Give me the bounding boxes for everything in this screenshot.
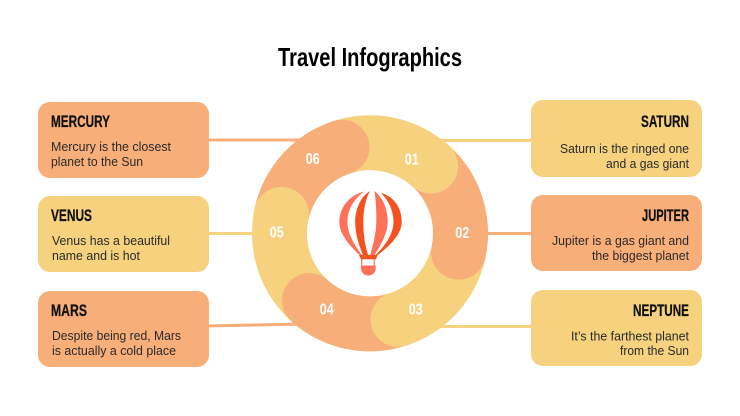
panel: jupiter [531, 195, 702, 271]
panel: saturn: and a gas giant [606, 157, 689, 171]
title: Travel Infographics [278, 42, 462, 72]
panel: venus [38, 196, 209, 272]
panel: mars: MARS [51, 302, 87, 320]
panel: saturn: SATURN [641, 113, 689, 131]
panel: neptune: It’s the farthest planet [571, 330, 690, 344]
panel: neptune: NEPTUNE [633, 302, 689, 320]
panel: mercury: planet to the Sun [51, 155, 143, 169]
panel: mars [38, 291, 209, 367]
panel: venus: Venus has a beautiful [52, 234, 170, 248]
panel: jupiter: JUPITER [642, 207, 689, 225]
ring diagram: 06 [306, 151, 320, 168]
ring diagram: 04 [320, 302, 334, 318]
panel: jupiter: the biggest planet [592, 249, 690, 263]
panel: mars: Despite being red, Mars [52, 329, 181, 343]
ring diagram: 05 [270, 224, 284, 242]
panel: venus: name and is hot [52, 249, 141, 263]
panel: mars: is actually a cold place [52, 344, 176, 358]
panel: neptune: from the Sun [620, 344, 689, 358]
connector lines [205, 140, 535, 326]
panel: mercury: Mercury is the closest [51, 140, 172, 154]
panel: mercury [38, 102, 209, 178]
ring diagram: 02 [455, 225, 469, 242]
panel: neptune [531, 290, 702, 366]
ring diagram [254, 138, 469, 347]
panel: saturn [531, 100, 702, 177]
panel: saturn: Saturn is the ringed one [560, 142, 689, 156]
panel: venus: VENUS [51, 207, 92, 225]
ring diagram: 01 [405, 152, 419, 168]
panel: mercury: MERCURY [51, 113, 110, 131]
ring diagram: 03 [409, 302, 423, 318]
icon: hot air balloon [339, 191, 402, 276]
panel: jupiter: Jupiter is a gas giant and [552, 234, 689, 248]
